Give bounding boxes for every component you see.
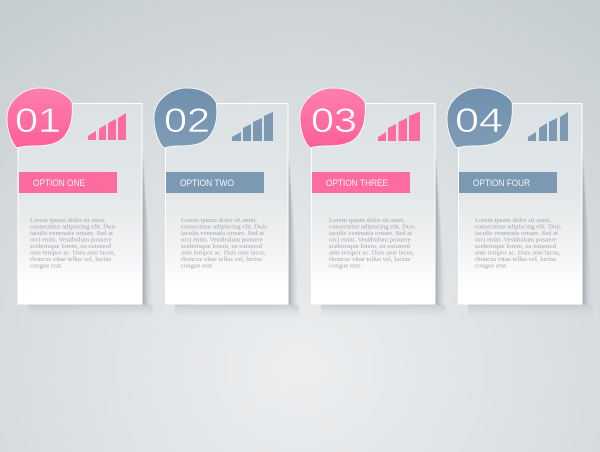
body text: congue erat. bbox=[181, 262, 214, 270]
body text: orci enim. Vestibulum posuere bbox=[475, 236, 557, 244]
body text: Lorem ipsum dolor sit amet, bbox=[475, 217, 551, 224]
label bar bbox=[19, 172, 117, 193]
body text: scelerisque lorem, eu euismod bbox=[329, 243, 411, 250]
panel: option two bbox=[154, 88, 299, 319]
body text: consectetur adipiscing elit. Duis bbox=[181, 224, 267, 230]
body text: congue erat. bbox=[475, 262, 508, 270]
body text: rhoncus vitae tellus vel, luctus bbox=[475, 256, 557, 263]
body text: orci enim. Vestibulum posuere bbox=[329, 236, 411, 244]
body text: ante tempor ac. Duis ante lacus, bbox=[329, 250, 415, 256]
label bar bbox=[166, 172, 264, 193]
icon: signal bars bbox=[232, 112, 273, 141]
body text: scelerisque lorem, eu euismod bbox=[30, 243, 112, 250]
number badge: 04 bbox=[455, 102, 503, 140]
body text: consectetur adipiscing elit. Duis bbox=[475, 224, 561, 230]
body text: iaculis venenatis ornare. Sed at bbox=[329, 230, 412, 237]
card shadow bbox=[175, 150, 299, 319]
label bar bbox=[312, 172, 410, 193]
body text: scelerisque lorem, eu euismod bbox=[181, 243, 263, 250]
body text: Lorem ipsum dolor sit amet, bbox=[329, 217, 405, 224]
body text: iaculis venenatis ornare. Sed at bbox=[181, 230, 264, 237]
body text: Lorem ipsum dolor sit amet, bbox=[181, 217, 257, 224]
number badge bbox=[447, 88, 512, 148]
number badge bbox=[300, 88, 365, 148]
panel: option three bbox=[300, 88, 446, 319]
icon: signal bars bbox=[378, 112, 420, 141]
body text: consectetur adipiscing elit. Duis bbox=[329, 224, 415, 230]
body text: ante tempor ac. Duis ante lacus, bbox=[475, 250, 561, 256]
card shadow bbox=[28, 150, 153, 319]
label bar bbox=[459, 172, 557, 193]
panel: option four bbox=[447, 88, 593, 319]
number badge: 02 bbox=[164, 102, 210, 140]
body text: congue erat. bbox=[329, 262, 362, 270]
panel: option one bbox=[7, 88, 153, 319]
body text: Lorem ipsum dolor sit amet, bbox=[30, 217, 106, 224]
label bar: OPTION THREE bbox=[326, 178, 388, 188]
number badge: 01 bbox=[15, 102, 61, 140]
body text: orci enim. Vestibulum posuere bbox=[181, 236, 263, 244]
body text: rhoncus vitae tellus vel, luctus bbox=[181, 256, 263, 263]
card bbox=[312, 104, 435, 304]
number badge bbox=[154, 88, 217, 148]
card bbox=[18, 104, 142, 304]
body text: ante tempor ac. Duis ante lacus, bbox=[181, 250, 267, 256]
label bar: OPTION FOUR bbox=[473, 178, 530, 188]
body text: iaculis venenatis ornare. Sed at bbox=[475, 230, 558, 237]
number badge bbox=[7, 88, 72, 148]
icon: signal bars bbox=[528, 112, 568, 141]
card bbox=[458, 104, 582, 304]
label bar: OPTION TWO bbox=[180, 178, 234, 188]
number badge: 03 bbox=[311, 102, 357, 140]
body text: rhoncus vitae tellus vel, luctus bbox=[329, 256, 411, 263]
body text: consectetur adipiscing elit. Duis bbox=[30, 224, 116, 230]
body text: scelerisque lorem, eu euismod bbox=[475, 243, 557, 250]
label bar: OPTION ONE bbox=[33, 178, 85, 188]
body text: iaculis venenatis ornare. Sed at bbox=[30, 230, 113, 237]
body text: rhoncus vitae tellus vel, luctus bbox=[30, 256, 112, 263]
card bbox=[166, 104, 288, 304]
icon: signal bars bbox=[88, 113, 126, 140]
body text: ante tempor ac. Duis ante lacus, bbox=[30, 250, 116, 256]
body text: congue erat. bbox=[30, 262, 63, 270]
card shadow bbox=[321, 150, 446, 319]
card shadow bbox=[468, 150, 593, 319]
body text: orci enim. Vestibulum posuere bbox=[30, 236, 112, 244]
